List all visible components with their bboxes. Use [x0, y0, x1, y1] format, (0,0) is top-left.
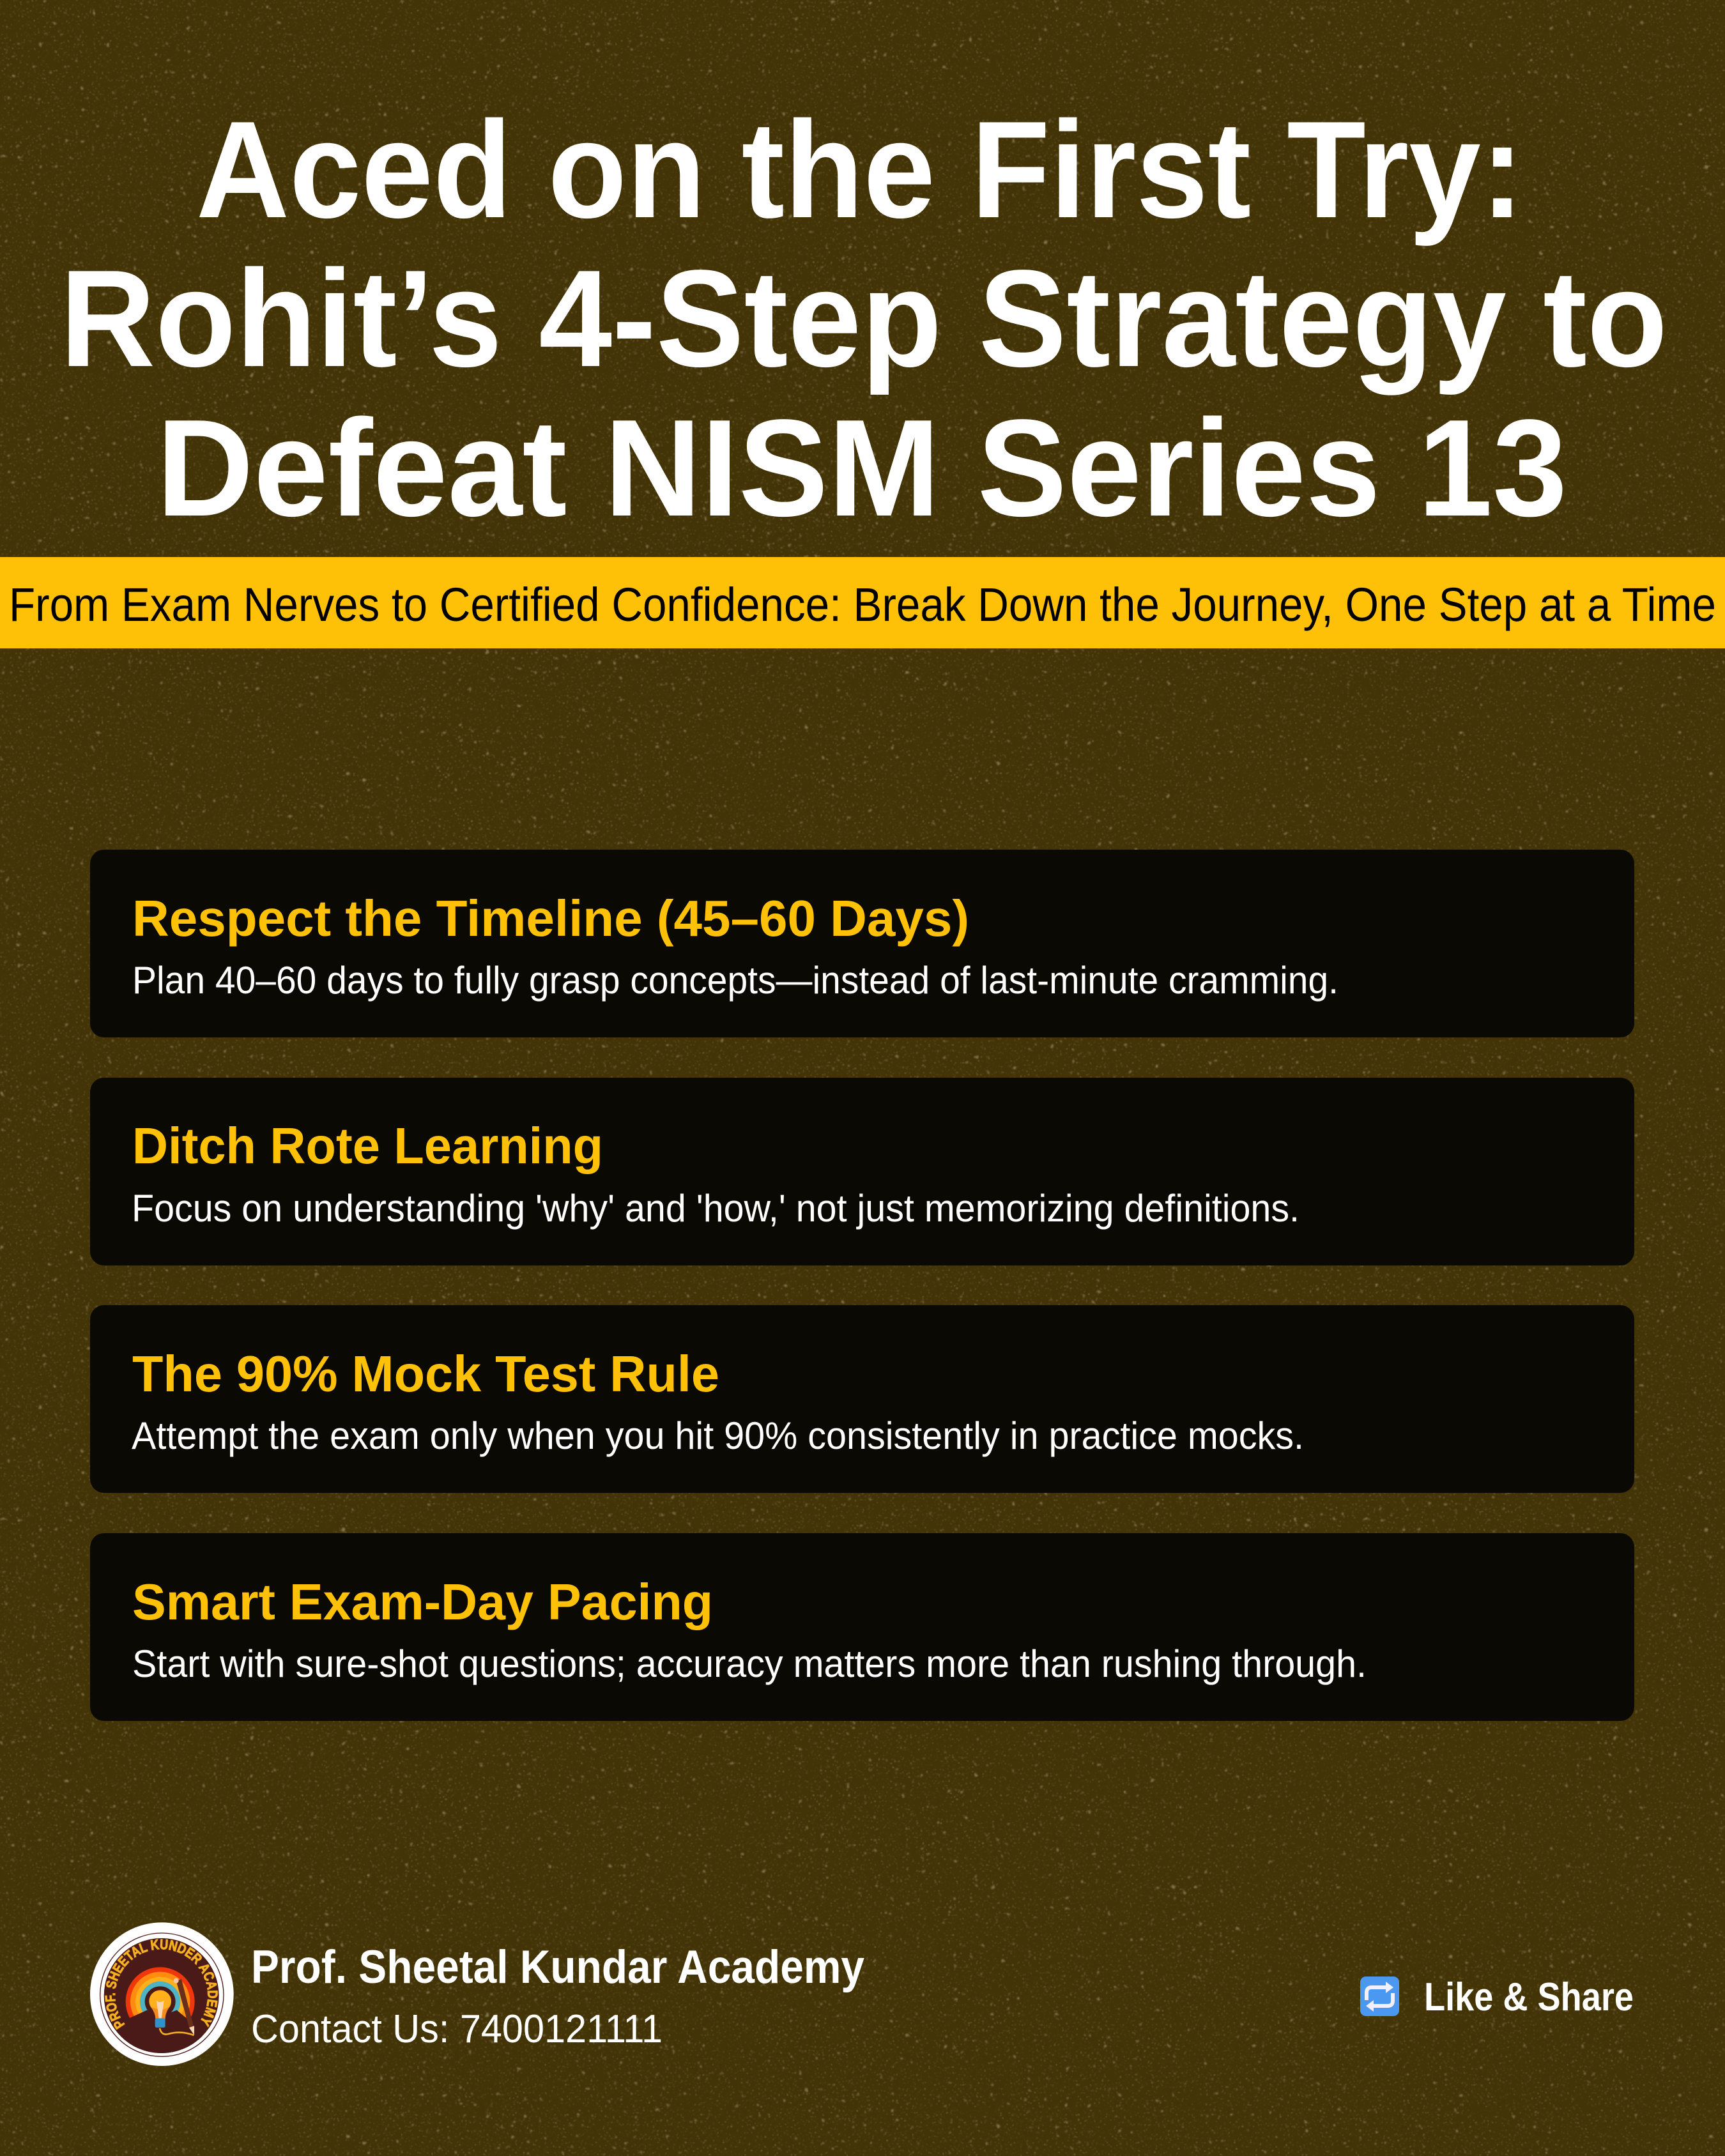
subtitle banner — [0, 557, 1725, 648]
title: Rohit’s 4-Step Strategy to — [60, 241, 1667, 395]
step 1 heading: Respect the Timeline (45–60 Days) — [132, 890, 969, 947]
panel: step 4 smart exam-day pacing — [90, 1533, 1634, 1721]
icon: academy logo badge: PROF. SHEETAL KUNDER ACADEMY — [105, 1939, 218, 2030]
contact number: Contact Us: 7400121111 — [251, 2007, 663, 2051]
step 4 heading: Smart Exam-Day Pacing — [132, 1573, 713, 1630]
academy name: Prof. Sheetal Kundar Academy — [251, 1941, 864, 1993]
panel: step 3 mock test rule — [90, 1305, 1634, 1493]
title: Aced on the First Try: — [196, 92, 1524, 247]
icon: repeat arrows — [1360, 1976, 1399, 2016]
icon: academy logo badge — [90, 1922, 234, 2066]
title — [60, 92, 1667, 545]
step 3 description: Attempt the exam only when you hit 90% consistently in practice mocks. — [132, 1414, 1304, 1457]
like and share label: Like & Share — [1424, 1975, 1634, 2019]
step 2 heading: Ditch Rote Learning — [132, 1117, 603, 1174]
panel: step 1 respect the timeline — [90, 850, 1634, 1037]
step 1 description: Plan 40–60 days to fully grasp concepts—instead of last-minute cramming. — [132, 959, 1338, 1002]
step 2 description: Focus on understanding 'why' and 'how,' not just memorizing definitions. — [132, 1187, 1300, 1230]
step 3 heading: The 90% Mock Test Rule — [132, 1345, 719, 1402]
step 4 description: Start with sure-shot questions; accuracy matters more than rushing through. — [132, 1642, 1367, 1685]
panel: step 2 ditch rote learning — [90, 1078, 1634, 1265]
title: Defeat NISM Series 13 — [157, 390, 1567, 545]
